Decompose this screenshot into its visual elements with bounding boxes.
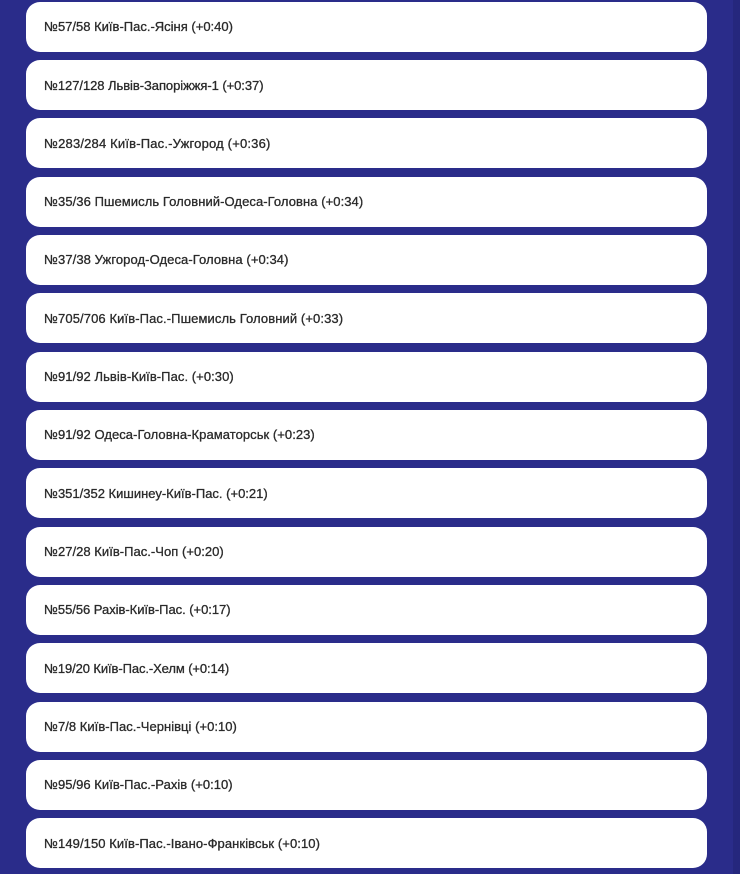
card: train 351/352: [26, 468, 707, 518]
card: train 705/706: №705/706 Київ-Пас.-Пшемисль Головний (+0:33): [44, 311, 343, 326]
card: train 27/28: [26, 527, 707, 577]
card: train 55/56: №55/56 Рахів-Київ-Пас. (+0:17): [44, 602, 231, 617]
card: train 19/20: №19/20 Київ-Пас.-Хелм (+0:14): [44, 661, 229, 676]
card: train 95/96: №95/96 Київ-Пас.-Рахів (+0:10): [44, 777, 233, 792]
card: train 149/150: [26, 818, 707, 868]
card: train 283/284: [26, 118, 707, 168]
card: train 55/56: [26, 585, 707, 635]
card: train 91/92 Lviv: №91/92 Львів-Київ-Пас. (+0:30): [44, 369, 234, 384]
card: train 37/38: №37/38 Ужгород-Одеса-Головна (+0:34): [44, 252, 289, 267]
card: train 7/8: №7/8 Київ-Пас.-Чернівці (+0:10): [44, 719, 237, 734]
card: train 95/96: [26, 760, 707, 810]
card: train 57/58: №57/58 Київ-Пас.-Ясіня (+0:40): [44, 19, 233, 34]
card: train 37/38: [26, 235, 707, 285]
card: train 7/8: [26, 702, 707, 752]
card: train 283/284: №283/284 Київ-Пас.-Ужгород (+0:36): [44, 136, 270, 151]
card: train 91/92 Lviv: [26, 352, 707, 402]
card: train 19/20: [26, 643, 707, 693]
card: train 149/150: №149/150 Київ-Пас.-Івано-Франківськ (+0:10): [44, 836, 320, 851]
card: train 35/36: [26, 177, 707, 227]
card: train 91/92 Odesa: [26, 410, 707, 460]
card: train 127/128: [26, 60, 707, 110]
card: train 91/92 Odesa: №91/92 Одеса-Головна-Краматорськ (+0:23): [44, 427, 315, 442]
card: train 705/706: [26, 293, 707, 343]
card: train 57/58: [26, 2, 707, 52]
card: train 351/352: №351/352 Кишинеу-Київ-Пас. (+0:21): [44, 486, 268, 501]
card: train 27/28: №27/28 Київ-Пас.-Чоп (+0:20): [44, 544, 224, 559]
right edge band: [733, 0, 740, 874]
card: train 127/128: №127/128 Львів-Запоріжжя-1 (+0:37): [44, 78, 263, 93]
card: train 35/36: №35/36 Пшемисль Головний-Одеса-Головна (+0:34): [44, 194, 363, 209]
